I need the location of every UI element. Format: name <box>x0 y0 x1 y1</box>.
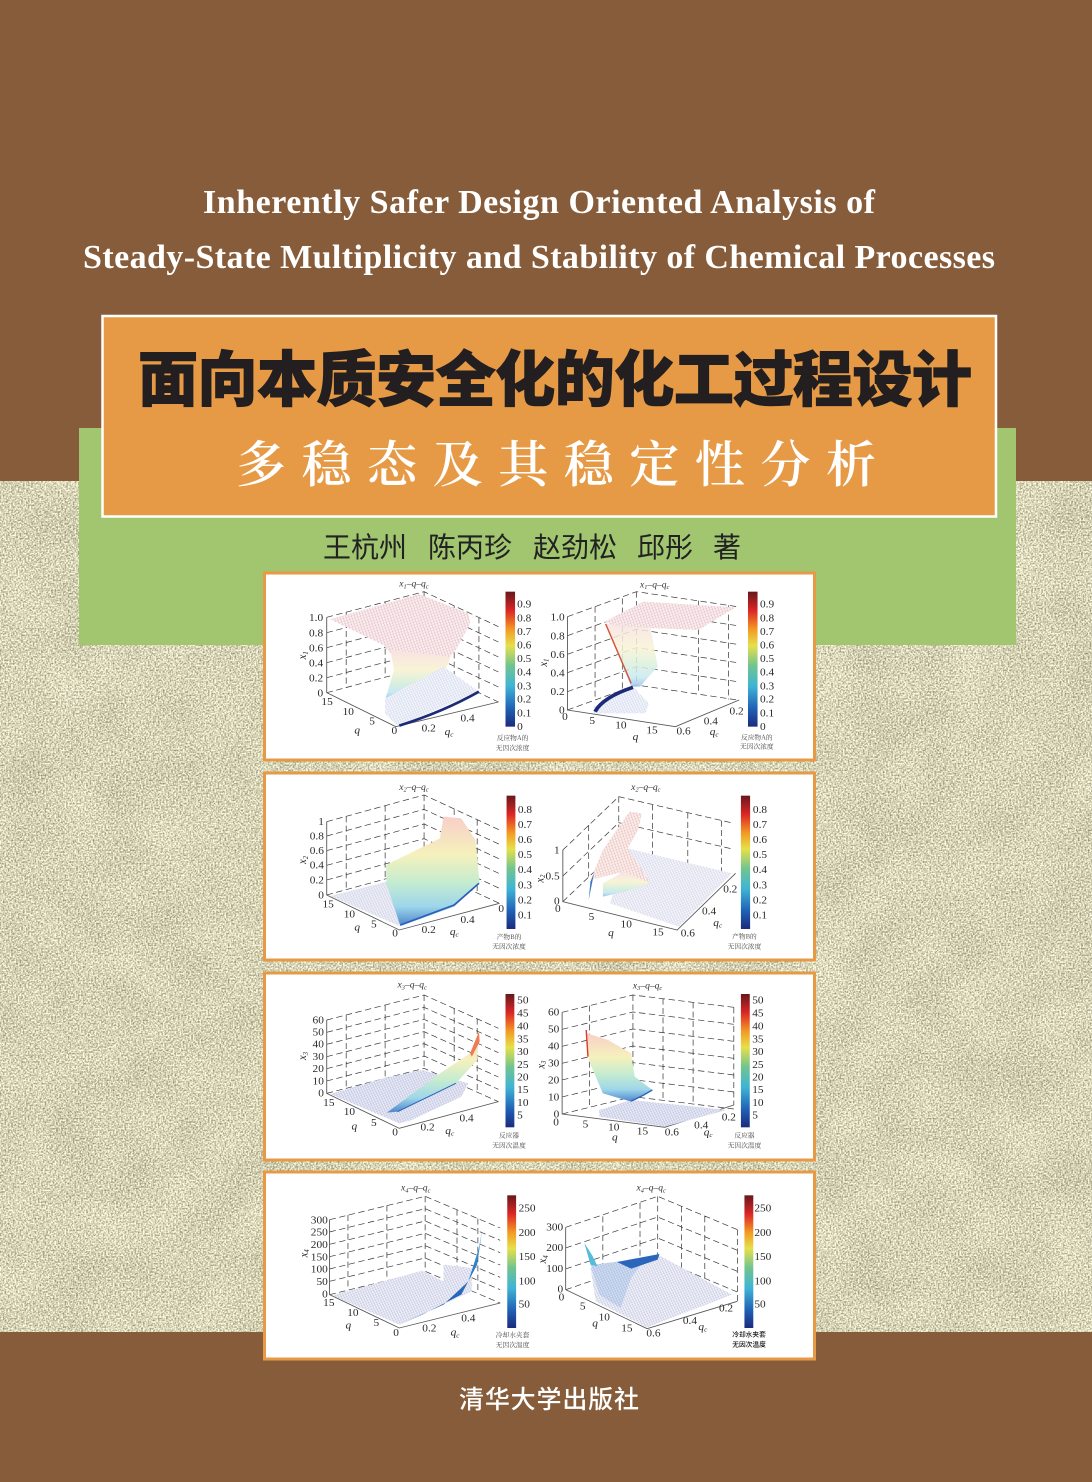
chart: x4 left: 50 <box>316 1276 328 1288</box>
chart: x1 left: c <box>426 583 429 590</box>
chart: x1 right: 0.4 <box>704 716 718 727</box>
chart: x2 left: 0.6 <box>310 845 324 857</box>
chart: x4 left: 250 <box>311 1227 328 1239</box>
top brown band <box>0 0 1092 481</box>
chart: x2 right: 15 <box>652 927 664 939</box>
chart: x3 right: c <box>659 985 663 992</box>
chart: x1 left: 5 <box>369 716 375 728</box>
chart: x4 left: q <box>345 1320 352 1332</box>
chart: x2 left: 0.2 <box>310 875 324 886</box>
chart: x3 right: q <box>612 1132 618 1144</box>
chart: x2 left: q <box>354 922 361 934</box>
chart: x2 left: q <box>450 926 456 938</box>
chart: x3 left: 0 <box>392 1127 398 1138</box>
colorbar: x3 left: 反应器 <box>499 1130 520 1139</box>
colorbar: x2 right: 产物B的 <box>732 931 757 940</box>
chart: x1 left: 1.0 <box>309 612 324 624</box>
chart: x3 left: x <box>297 1055 309 1060</box>
authors: 陈丙珍 <box>428 532 512 563</box>
colorbar: x2 left <box>492 796 533 951</box>
chart: x1 right: q <box>710 726 715 738</box>
chart: x2 right: 10 <box>621 919 632 931</box>
chart: x1 left: 0 <box>392 725 398 737</box>
chart: x4 left: –q–q <box>407 1184 428 1194</box>
chart: x2 right: 1 <box>554 845 560 856</box>
chart: x2 left: 5 <box>371 919 377 930</box>
chart: x3 left: 20 <box>313 1063 324 1075</box>
authors: 著 <box>713 532 741 563</box>
colorbar: x3 left: 20 <box>517 1072 529 1083</box>
chart: x4 right: –q–q <box>643 1184 663 1194</box>
colorbar: x2 right: 0.3 <box>753 880 768 891</box>
colorbar: x2 right: 0.4 <box>753 864 768 876</box>
chart: x1 right: 0.8 <box>550 631 565 642</box>
chart: x4 right <box>537 1184 737 1339</box>
colorbar: x1 left: 0.4 <box>517 667 532 679</box>
chart: x4 right: 0.4 <box>683 1315 698 1327</box>
chart: x3 left: 15 <box>323 1097 335 1109</box>
chart: x4 right: c <box>704 1327 707 1334</box>
chart: x4 right: x <box>537 1259 549 1263</box>
colorbar: x3 right: 50 <box>752 995 764 1007</box>
chart: x2 left: 2 <box>404 787 407 794</box>
colorbar: x3 left: 25 <box>517 1059 529 1071</box>
colorbar: x1 left: 无因次浓度 <box>496 742 530 752</box>
colorbar: x1 left: 0.6 <box>517 640 532 651</box>
colorbar: x1 right: 0 <box>760 721 766 733</box>
colorbar: x2 left: 0.5 <box>518 849 533 861</box>
chart: x3 left: 60 <box>313 1015 324 1026</box>
colorbar: x3 right: 20 <box>752 1072 764 1083</box>
chart: x3 left: 3 <box>303 1051 310 1056</box>
chart: x1 left: x <box>399 580 404 590</box>
chart: x4 right: 15 <box>621 1323 633 1334</box>
colorbar: x1 right: 反应物A的 <box>741 732 773 741</box>
chart: x3 left: 3 <box>401 984 405 991</box>
colorbar: x4 left: 冷却水夹套 <box>496 1329 530 1339</box>
colorbar: x1 left: 0.5 <box>517 653 532 665</box>
chart: x4 right: x <box>636 1184 641 1194</box>
chart: x3 right: 50 <box>548 1024 560 1036</box>
chart: x1 left: q <box>445 726 450 738</box>
chart: x2 left: 15 <box>322 899 334 911</box>
colorbar: x3 left <box>492 994 529 1149</box>
chart: x3 right: 5 <box>583 1119 589 1130</box>
colorbar: x2 left: 0.7 <box>518 819 533 831</box>
chart: x1 right: 15 <box>646 725 658 736</box>
chart: x4 left: 15 <box>323 1297 335 1309</box>
colorbar: x3 right: 15 <box>752 1084 764 1096</box>
colorbar: x3 left: 35 <box>517 1034 529 1045</box>
chart: x3 right: 0.4 <box>694 1120 709 1132</box>
colorbar: x1 right: 0.6 <box>760 640 775 651</box>
colorbar: x2 left: 0.2 <box>518 895 532 906</box>
colorbar: x3 right: 10 <box>752 1097 764 1109</box>
chart: x2 right <box>534 783 737 940</box>
colorbar: x4 left: 无因次温度 <box>496 1339 530 1349</box>
chart: x4 right: c <box>663 1187 666 1194</box>
chart: x3 left: c <box>424 984 427 991</box>
chart: x2 right: 5 <box>589 911 595 923</box>
panel: x2 charts <box>264 773 814 960</box>
chart: x4 left: 150 <box>311 1252 328 1263</box>
colorbar: x1 right: 无因次浓度 <box>740 741 774 751</box>
chart: x2 left: 0.8 <box>310 831 324 842</box>
chart: x3 left: 5 <box>371 1117 377 1129</box>
authors: 赵劲松 <box>533 532 617 563</box>
chart: x2 left: 0 <box>498 903 505 915</box>
colorbar: x1 right: 0.2 <box>760 694 774 706</box>
chart: x4 left: c <box>428 1187 431 1194</box>
colorbar: x1 right: 0.1 <box>760 708 774 719</box>
colorbar: x3 left: 10 <box>517 1097 529 1109</box>
chart: x2 left: 1 <box>318 816 324 828</box>
chart: x1 right: 0.6 <box>676 726 691 737</box>
colorbar: x1 left: 0.9 <box>517 599 532 611</box>
chart: x4 right: q <box>592 1318 598 1330</box>
chart: x2 left: c <box>426 787 429 794</box>
chart: x4 right: 0.2 <box>719 1303 733 1315</box>
colorbar: x2 left: 0.8 <box>518 804 533 816</box>
chart: x4 left: x <box>298 1253 310 1257</box>
colorbar: x4 right: 200 <box>754 1227 772 1239</box>
chart: x3 left: 10 <box>313 1076 324 1087</box>
colorbar: x1 left: 0.8 <box>517 613 532 624</box>
chart: x2 right: 0.4 <box>702 906 717 917</box>
chart: x4 right: 4 <box>543 1255 550 1259</box>
chart: x4 right: 300 <box>546 1222 564 1233</box>
chart: x3 right: 60 <box>548 1007 560 1019</box>
colorbar: x4 left <box>496 1195 536 1349</box>
chart: x1 left: 1 <box>303 651 310 655</box>
colorbar: x2 right: 无因次浓度 <box>728 941 762 951</box>
colorbar: x3 right: 反应器 <box>734 1130 755 1139</box>
colorbar: x1 left: 0.7 <box>517 626 532 638</box>
colorbar: x2 left: 无因次浓度 <box>492 941 526 951</box>
colorbar: x3 left: 45 <box>517 1008 529 1020</box>
colorbar: x4 right: 150 <box>754 1251 772 1263</box>
chart: x2 left: 0.4 <box>310 860 324 872</box>
colorbar: x3 right: 30 <box>752 1046 764 1058</box>
chart: x2 right: 0.2 <box>723 884 737 896</box>
colorbar: x3 right: 35 <box>752 1034 764 1045</box>
colorbar: x2 left: 0.4 <box>518 864 533 876</box>
chart: x4 right: 100 <box>546 1263 564 1275</box>
authors <box>323 532 741 563</box>
colorbar: x4 right: 冷却水夹套 <box>732 1329 766 1338</box>
chart: x3 right: 30 <box>548 1058 560 1070</box>
colorbar: x2 right: 0.1 <box>753 910 767 922</box>
chart: x1 left: 0.2 <box>309 673 323 684</box>
colorbar: x2 left: 0.3 <box>518 880 533 891</box>
colorbar: x1 left <box>496 592 532 752</box>
chart: x1 left <box>297 580 498 739</box>
chart: x2 left: 2 <box>303 855 310 859</box>
chart: x3 left: 0 <box>318 1088 324 1100</box>
chart: x1 right: 10 <box>615 720 627 731</box>
colorbar: x3 right: 5 <box>752 1110 758 1122</box>
chart: x1 right: q <box>633 731 639 743</box>
colorbar: x4 right: 250 <box>754 1203 772 1215</box>
chart: x3 right: c <box>709 1132 713 1139</box>
colorbar: x1 right: 0.5 <box>760 653 775 665</box>
chart: x2 right: 0.6 <box>681 928 695 940</box>
chart: x2 left: –q–q <box>406 783 426 793</box>
chart: x2 right: 0 <box>554 896 560 907</box>
chart: x1 left: 15 <box>321 696 333 708</box>
colorbar: x3 left: 30 <box>517 1046 529 1058</box>
colorbar: x4 right <box>732 1195 772 1348</box>
colorbar: x4 left: 150 <box>519 1251 536 1263</box>
chinese main title: 面向本质安全化的化工过程设计 <box>138 347 972 414</box>
chart: x1 right: 0 <box>559 705 565 717</box>
chart: x1 right: c <box>667 584 670 591</box>
chart: x3 right: 0 <box>553 1117 559 1128</box>
chart: x1 right <box>538 581 744 743</box>
chart: x4 right: 4 <box>641 1187 644 1194</box>
chart: x2 left: 0.2 <box>422 924 436 936</box>
chart: x3 right: q <box>704 1127 709 1138</box>
chart: x4 right: 5 <box>580 1301 586 1312</box>
chart: x2 right: 2 <box>540 874 547 878</box>
colorbar: x1 right: 0.3 <box>760 681 775 692</box>
chart: x4 left: 0 <box>322 1289 328 1300</box>
chart: x2 left: c <box>456 932 459 939</box>
chart: x4 left: 0 <box>393 1327 399 1339</box>
chart: x4 left: 100 <box>311 1264 328 1276</box>
chart: x3 left: 30 <box>313 1051 324 1063</box>
colorbar: x1 left: 0.1 <box>517 708 531 719</box>
colorbar: x1 left: 反应物A的 <box>497 732 529 742</box>
colorbar: x3 left: 无因次温度 <box>492 1140 526 1149</box>
chart: x3 right: 0.2 <box>722 1112 736 1124</box>
chart: x3 right: 3 <box>636 985 640 992</box>
publisher: 清华大学出版社 <box>459 1386 639 1414</box>
authors: 王杭州 <box>323 532 407 563</box>
chart: x3 left: 10 <box>344 1106 356 1118</box>
colorbar: x3 right <box>728 994 764 1149</box>
chart: x4 right: q <box>698 1321 704 1333</box>
chart: x3 left: 0.2 <box>421 1122 435 1134</box>
colorbar: x1 right: 0.4 <box>760 667 775 679</box>
authors: 邱彤 <box>637 532 693 563</box>
colorbar: x2 right: 0.8 <box>753 804 768 816</box>
colorbar: x1 right: 0.8 <box>760 613 775 624</box>
chart: x3 left <box>297 981 498 1138</box>
chart: x1 right: 0.2 <box>730 706 744 718</box>
chart: x2 right: q <box>608 927 614 939</box>
chart: x1 left: x <box>297 655 309 659</box>
chart: x4 left: 10 <box>347 1307 359 1319</box>
colorbar: x3 right: 40 <box>752 1021 764 1032</box>
chart: x1 left: –q–q <box>406 580 426 590</box>
chart: x2 left: x <box>399 783 404 793</box>
chart: x3 right: 20 <box>548 1075 560 1086</box>
chart: x3 right: x <box>535 1064 548 1069</box>
chart: x2 right: 0 <box>555 903 561 915</box>
chart: x3 right: 40 <box>548 1041 560 1053</box>
colorbar: x3 left: 50 <box>517 995 529 1007</box>
chart: x1 right: 1.0 <box>550 612 565 623</box>
colorbar: x2 right: 0.5 <box>753 849 768 861</box>
chart: x4 left: 0.2 <box>422 1323 436 1335</box>
colorbar: x2 left: 产物B的 <box>497 931 522 941</box>
chart: x3 right: 15 <box>637 1126 649 1138</box>
chart: x2 right: x <box>534 878 546 883</box>
chart: x3 left: 0.4 <box>459 1113 474 1125</box>
chart: x4 right: 200 <box>546 1242 564 1254</box>
colorbar: x4 left: 50 <box>519 1299 530 1311</box>
chart: x1 right: 0 <box>562 711 568 723</box>
chart: x4 right: 0 <box>558 1284 564 1296</box>
chart: x3 left: x <box>398 981 402 991</box>
chart: x1 left: c <box>450 732 453 739</box>
colorbar: x3 right: 无因次温度 <box>728 1140 762 1149</box>
colorbar: x3 left: 15 <box>517 1084 529 1096</box>
chart: x3 left: q <box>352 1121 358 1132</box>
chart: x2 right: c <box>658 787 661 794</box>
chart: x4 right: 10 <box>599 1312 610 1324</box>
colorbar: x4 left: 200 <box>519 1227 536 1239</box>
colorbar: x3 right: 45 <box>752 1008 764 1020</box>
chart: x2 right: –q–q <box>638 783 658 793</box>
chart: x4 left <box>298 1184 500 1339</box>
chart: x2 left: 0.4 <box>461 914 475 926</box>
colorbar: x1 left: 0 <box>517 721 523 733</box>
chart: x3 left: q <box>445 1125 451 1137</box>
chart: x2 left <box>297 783 505 940</box>
colorbar: x2 right: 0.2 <box>753 895 767 906</box>
colorbar: x4 right: 100 <box>754 1276 772 1287</box>
chart: x4 right: 0.6 <box>646 1328 661 1339</box>
chart: x1 right: –q–q <box>646 581 667 590</box>
chart: x1 right: c <box>715 732 719 739</box>
chart: x2 right: 0.5 <box>545 871 560 882</box>
green band <box>79 428 1016 645</box>
chart: x4 left: 200 <box>311 1239 328 1251</box>
colorbar: x2 left: 0.6 <box>518 834 533 846</box>
chart: x4 left: 4 <box>405 1187 408 1194</box>
colorbar: x3 right: 25 <box>752 1059 764 1071</box>
chart: x1 right: 0.4 <box>550 668 565 679</box>
colorbar: x3 left: 5 <box>517 1110 523 1122</box>
chart: x1 left: 0.6 <box>309 643 324 654</box>
chart: x4 left: 300 <box>311 1215 328 1226</box>
chart: x4 left: x <box>401 1184 405 1194</box>
chart: x3 left: 40 <box>313 1039 324 1051</box>
chart: x2 right: x <box>631 783 635 793</box>
textured sand background <box>0 481 1092 1333</box>
colorbar: x2 right: 0.7 <box>753 819 768 831</box>
colorbar: x1 right <box>740 592 775 751</box>
orange title box <box>102 316 996 516</box>
colorbar: x2 right: 0.6 <box>753 834 768 846</box>
chart: x3 left: 50 <box>313 1027 324 1039</box>
chart: x2 right: 2 <box>635 787 639 794</box>
colorbar: x4 right: 无因次温度 <box>732 1339 766 1348</box>
english title: Inherently Safer Design Oriented Analysis of <box>203 184 876 221</box>
colorbar: x1 left: 0.3 <box>517 681 532 692</box>
chart: x1 right: 0.6 <box>550 649 565 661</box>
panel: x4 charts <box>264 1172 814 1359</box>
chart: x3 right: x <box>633 982 637 991</box>
english title <box>83 184 995 276</box>
chart: x3 right: 3 <box>541 1060 548 1065</box>
chart: x1 left: 0.8 <box>309 628 324 639</box>
chart: x4 right: 0 <box>559 1292 565 1304</box>
chart: x1 left: 0 <box>318 688 324 699</box>
colorbar: x1 right: 0.7 <box>760 626 775 638</box>
chart: x4 left: q <box>451 1327 456 1339</box>
chart: x2 right: c <box>719 923 722 930</box>
chart: x3 right: 0.6 <box>665 1127 679 1139</box>
chart: x2 left: 10 <box>344 909 356 920</box>
chart: x4 left: 5 <box>373 1317 380 1329</box>
chart: x1 left: 0.4 <box>461 713 475 724</box>
chart: x1 right: 1 <box>644 584 647 591</box>
chart: x3 right: –q–q <box>639 982 660 991</box>
chart: x1 right: 5 <box>589 715 596 727</box>
bottom brown band <box>0 1332 1092 1482</box>
chart: x1 right: 1 <box>544 659 551 662</box>
colorbar: x4 left: 250 <box>519 1203 536 1215</box>
colorbar: x3 left: 40 <box>517 1021 529 1032</box>
colorbar: x1 right: 0.9 <box>760 599 775 611</box>
chart: x3 right: 10 <box>548 1092 560 1103</box>
english title: Steady-State Multiplicity and Stability of Chemical Processes <box>83 239 995 276</box>
chart: x1 left: 1 <box>404 583 407 590</box>
chinese subtitle: 多稳态及其稳定性分析 <box>236 437 876 493</box>
chart: x4 left: 4 <box>304 1249 311 1253</box>
colorbar: x1 left: 0.2 <box>517 694 531 706</box>
chart: x2 right: q <box>713 917 719 929</box>
chart: x1 left: 0.2 <box>422 723 436 734</box>
chart: x3 right: 0 <box>554 1109 560 1120</box>
chart: x3 left: –q–q <box>404 981 424 991</box>
chart: x3 right: 10 <box>608 1122 620 1134</box>
chart: x1 left: 10 <box>343 706 354 718</box>
colorbar: x2 right <box>728 796 768 951</box>
chart: x3 left: c <box>451 1131 454 1138</box>
chart: x4 left: 0.4 <box>461 1313 476 1325</box>
chart: x1 left: 0.4 <box>309 658 324 669</box>
chart: x2 left: x <box>297 859 309 864</box>
chart: x1 right: 0.2 <box>550 686 565 698</box>
chart: x1 left: q <box>354 725 361 736</box>
panel: x1 charts <box>264 573 814 760</box>
colorbar: x2 left: 0.1 <box>518 910 532 922</box>
chart: x1 right: x <box>640 581 644 590</box>
chart: x4 left: c <box>456 1332 459 1339</box>
colorbar: x4 left: 100 <box>519 1276 536 1287</box>
panel: x3 charts <box>264 973 814 1160</box>
chart: x2 left: 0 <box>392 928 398 940</box>
chart: x1 right: x <box>538 662 550 667</box>
colorbar: x4 right: 50 <box>754 1299 766 1311</box>
chart: x3 right <box>535 982 736 1144</box>
chart: x2 left: 0 <box>318 890 324 901</box>
